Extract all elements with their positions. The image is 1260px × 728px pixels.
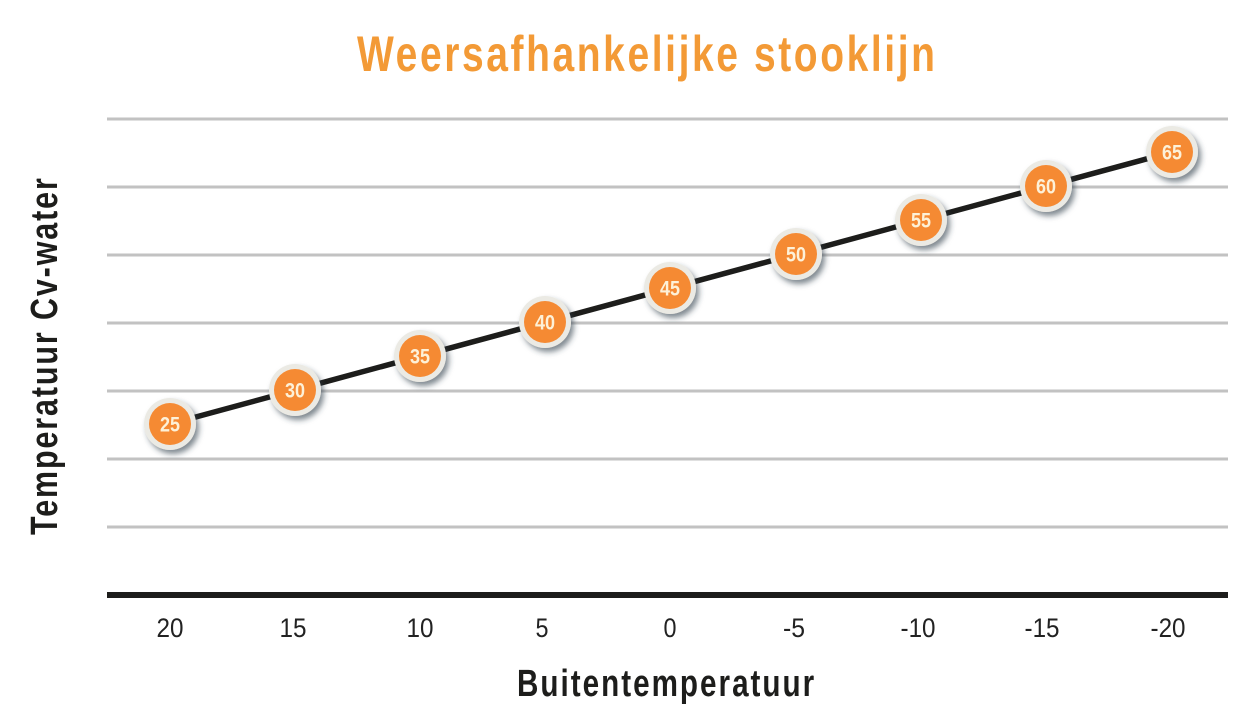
x axis tick labels: -20 (1150, 613, 1186, 643)
x axis tick labels (156, 613, 1186, 643)
x axis tick labels: -5 (783, 613, 805, 643)
point 65: 65 (1162, 142, 1182, 164)
point 50: 50 (786, 244, 806, 266)
x axis tick labels: -10 (900, 613, 936, 643)
x axis tick labels: 15 (280, 613, 306, 643)
point 35: 35 (410, 346, 430, 368)
x axis tick labels: 10 (406, 613, 434, 643)
title: Weersafhankelijke stooklijn (357, 25, 935, 82)
point 60 (1020, 160, 1072, 212)
point 30: 30 (285, 380, 305, 402)
y axis label: Temperatuur Cv-water (24, 178, 66, 535)
point 35 (394, 330, 446, 382)
point 45: 45 (660, 278, 680, 300)
point 25 (144, 398, 196, 450)
point 60: 60 (1036, 176, 1056, 198)
x axis tick labels: 0 (664, 613, 676, 643)
point 25: 25 (160, 414, 180, 436)
data line (170, 152, 1172, 424)
gridlines (107, 119, 1228, 527)
point 55: 55 (911, 210, 931, 232)
x axis tick labels: -15 (1024, 613, 1060, 643)
x axis tick labels: 5 (536, 613, 548, 643)
point 40 (519, 296, 571, 348)
point 45 (644, 262, 696, 314)
point 65 (1146, 126, 1198, 178)
point 50 (770, 228, 822, 280)
point 55 (895, 194, 947, 246)
x axis tick labels: 20 (156, 613, 184, 643)
x axis label: Buitentemperatuur (517, 663, 814, 705)
chart (107, 119, 1228, 595)
x axis line (107, 592, 1228, 598)
point 30 (269, 364, 321, 416)
point 40: 40 (535, 312, 555, 334)
